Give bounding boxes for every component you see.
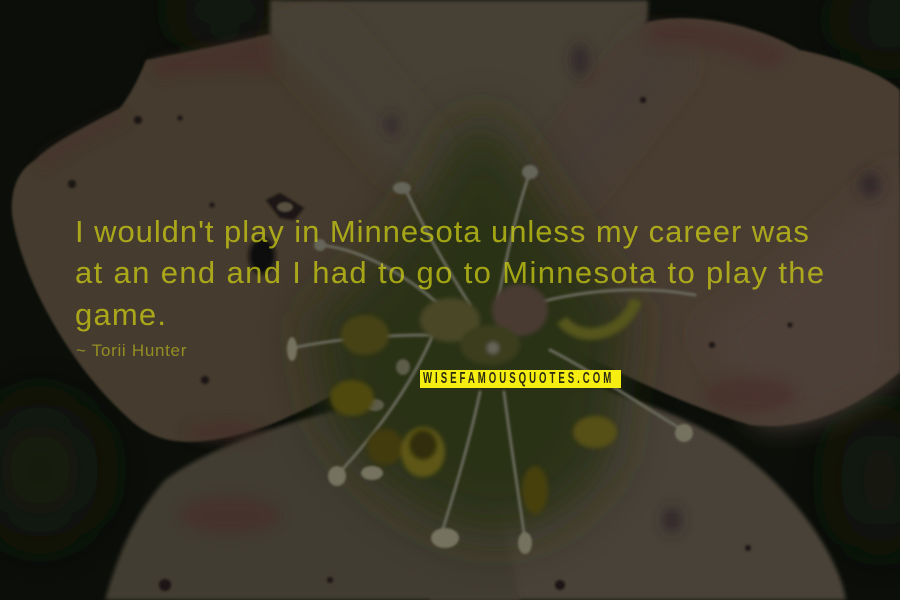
flower centre green [310,120,630,532]
watermark logo: WISEFAMOUSQUOTES.COM [423,370,614,387]
petal: bottom right [430,388,846,600]
petal: upper left [12,34,450,442]
quote line 2: at an end and I had to go to Minnesota to play the [75,255,826,290]
attribution: ~ Torii Hunter [76,341,187,360]
petal spots [68,97,792,591]
petal: bottom left [105,398,520,600]
petal seam blend right [540,30,690,200]
quote text [75,214,826,332]
petal: top [270,0,648,260]
yellow anther cluster [330,284,636,514]
stamen anthers [287,165,693,554]
petal: right [512,18,900,426]
petal seam blend [270,20,440,180]
petal mark: dark hole [249,238,275,274]
stamen filaments [292,172,695,540]
quote line 1: I wouldn't play in Minnesota unless my career was [75,214,810,249]
petal edge tint [36,23,795,533]
petal mark: ringed spot [266,193,304,220]
petal blotches [386,44,880,533]
quote line 3: game. [75,297,167,332]
petal: right lower shading [700,170,900,426]
